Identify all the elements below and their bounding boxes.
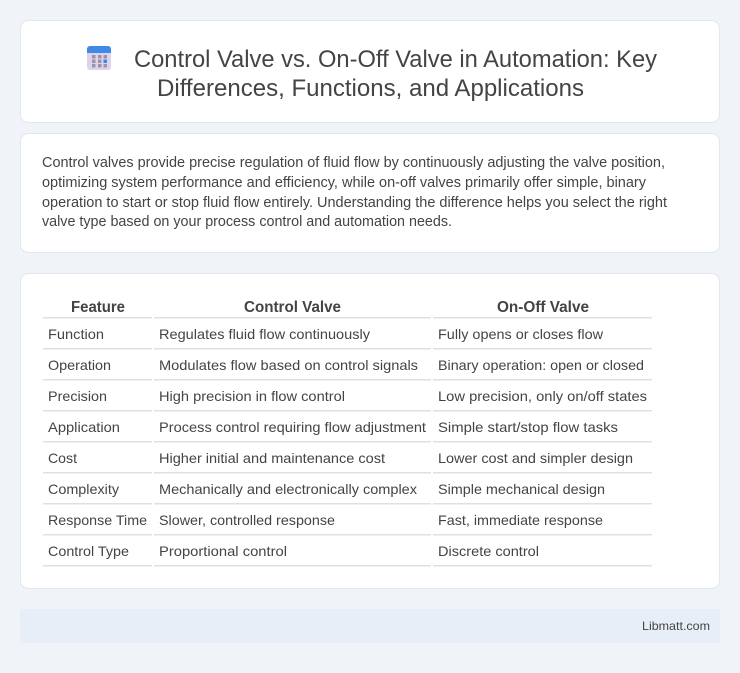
row: Cost [48,450,633,466]
summary text: valve type based on your process control and automation needs. [42,214,452,230]
summary text: Control valves provide precise regulation of fluid flow by continuously adjusting the valve position, [42,155,665,171]
panel: comparison table [20,274,720,588]
row: Complexity: Simple mechanical design [438,481,605,497]
footer text: Libmatt.com [642,619,710,633]
row: Complexity: Complexity [48,481,119,497]
row: Cost: Cost [48,450,77,466]
table header: Feature [71,299,125,316]
row: Precision: High precision in flow control [159,388,345,404]
row: Response Time: Fast, immediate response [438,512,603,528]
row: Precision: Precision [48,388,107,404]
panel: summary [20,134,720,252]
table header [71,299,589,316]
row: Application: Application [48,419,120,435]
row: Control Type: Discrete control [438,543,539,559]
row: Response Time: Response Time [48,512,147,528]
row: Cost: Lower cost and simpler design [438,450,633,466]
footer bar [20,609,720,643]
summary text: optimizing system performance and efficiency, while on-off valves primarily offer simple, binary [42,175,647,191]
row: Operation [48,357,644,373]
row: Operation: Binary operation: open or closed [438,357,644,373]
table header: On-Off Valve [497,299,589,316]
table rules [43,317,652,566]
title text: Control Valve vs. On-Off Valve in Automation: Key [134,46,657,73]
row: Application: Simple start/stop flow tasks [438,419,618,435]
icon: calendar [87,46,111,70]
summary text [42,155,667,230]
row: Precision: Low precision, only on/off states [438,388,647,404]
row: Function: Function [48,326,104,342]
panel: title [20,20,720,122]
title text [134,46,657,102]
row: Complexity [48,481,605,497]
row: Application [48,419,618,435]
row: Control Type [48,543,539,559]
row: Cost: Higher initial and maintenance cost [159,450,385,466]
row: Application: Process control requiring flow adjustment [159,419,426,435]
title text: Differences, Functions, and Applications [157,75,584,102]
summary text: operation to start or stop fluid flow entirely. Understanding the difference helps you select the right [42,195,667,211]
row: Precision [48,388,647,404]
row: Complexity: Mechanically and electronically complex [159,481,417,497]
row: Response Time: Slower, controlled response [159,512,335,528]
row: Function: Regulates fluid flow continuously [159,326,370,342]
row: Operation: Operation [48,357,111,373]
row: Function [48,326,604,342]
row: Response Time [48,512,603,528]
row: Function: Fully opens or closes flow [438,326,604,342]
row: Control Type: Control Type [48,543,129,559]
row: Operation: Modulates flow based on control signals [159,357,418,373]
table header: Control Valve [244,299,341,316]
row: Control Type: Proportional control [159,543,287,559]
